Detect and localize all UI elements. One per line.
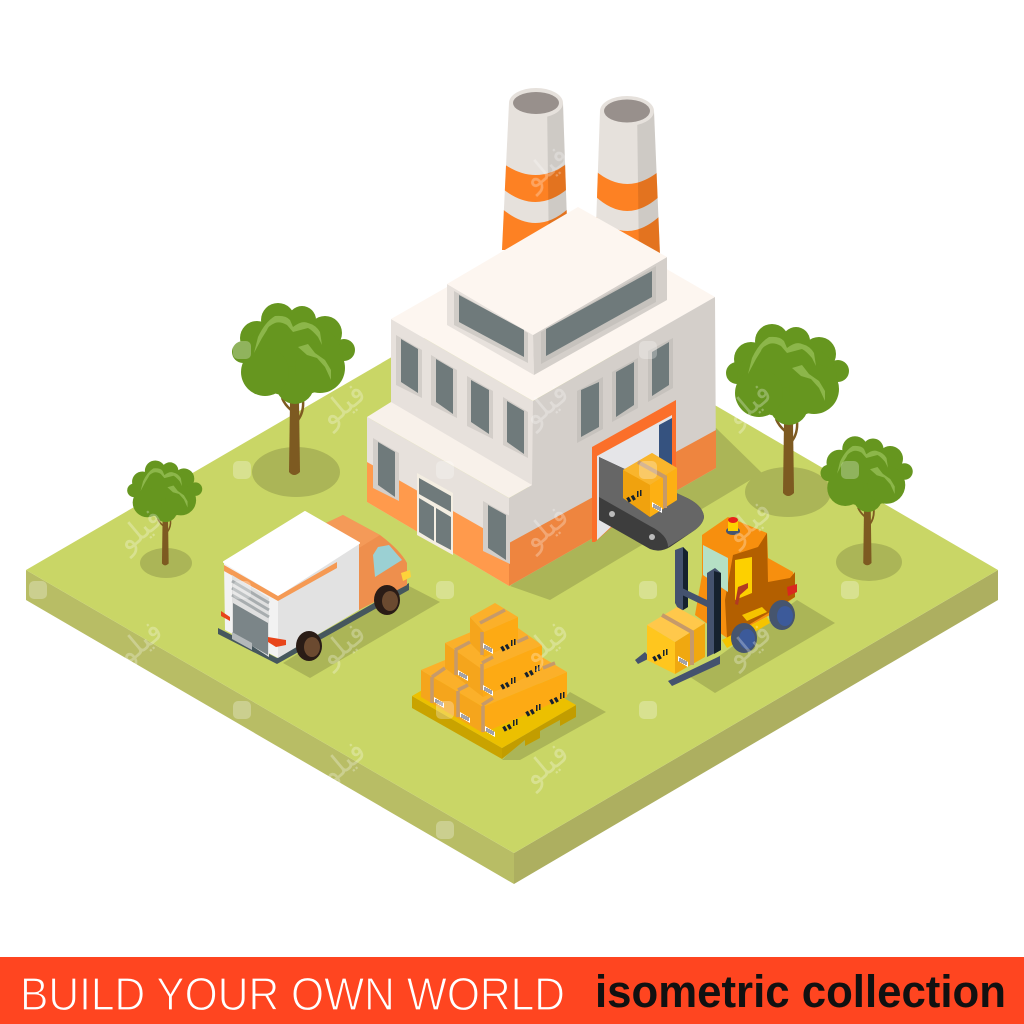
watermarks: فيلو — [311, 376, 373, 435]
box on conveyor — [623, 453, 677, 517]
bottom layer — [421, 635, 567, 733]
chimney: left — [502, 88, 567, 250]
body — [695, 517, 795, 638]
windows: right wall — [577, 338, 673, 443]
upper block roof — [391, 215, 715, 401]
carried box — [647, 607, 705, 674]
watermarks: فيلو — [514, 614, 576, 673]
tree: small left — [127, 460, 202, 565]
chimney: right — [596, 96, 660, 253]
windows: left wall — [373, 335, 528, 564]
cab — [326, 515, 411, 610]
pallet of boxes — [412, 603, 576, 759]
watermarks: فيلو — [514, 376, 576, 435]
watermarks: فيلو — [108, 614, 170, 673]
banner text: build your own world: BUILD YOUR OWN WORLD — [20, 968, 565, 1020]
ground shadows — [140, 428, 902, 760]
cargo box — [224, 512, 359, 658]
tail lights — [221, 611, 230, 621]
main right wall — [509, 297, 716, 586]
delivery truck — [218, 512, 411, 664]
mast front upright — [707, 568, 721, 657]
conveyor belt with box — [599, 453, 704, 551]
watermarks: فيلو — [514, 736, 576, 795]
handling marks — [434, 639, 564, 737]
orange base left — [367, 462, 509, 586]
wing roof — [367, 402, 532, 498]
mast rear upright — [675, 547, 688, 612]
watermarks: فيلو — [311, 734, 373, 793]
chassis — [218, 583, 409, 664]
footboards — [722, 607, 770, 648]
top box — [470, 603, 518, 657]
tree: small right — [820, 436, 913, 565]
watermarks: فيلو — [514, 139, 576, 198]
watermarks: فيلو — [108, 501, 170, 560]
rear shutter — [232, 575, 269, 657]
orange base right — [509, 430, 716, 586]
wheels — [296, 585, 400, 661]
watermarks: فيلو — [717, 376, 779, 435]
penthouse — [447, 207, 667, 375]
watermarks: فيلو — [717, 494, 779, 553]
wing left wall — [367, 417, 509, 586]
banner text: isometric collection: isometric collection — [595, 966, 1006, 1017]
watermarks: فيلو — [717, 616, 779, 675]
steering and lights — [735, 583, 797, 605]
fork front — [668, 656, 720, 686]
beacon — [726, 517, 740, 535]
banner — [0, 957, 1024, 1024]
entrance door — [417, 473, 453, 555]
factory building — [367, 207, 716, 586]
pallet — [412, 653, 576, 759]
fork rear — [635, 652, 650, 664]
tape strips — [432, 610, 555, 732]
cab interior — [735, 557, 752, 600]
watermarks: فيلو — [514, 499, 576, 558]
upper block left wall — [391, 319, 533, 490]
cab window — [703, 545, 728, 592]
body dark side — [725, 533, 795, 638]
wheels — [731, 600, 795, 653]
cross bar — [682, 588, 707, 607]
loading gate — [592, 400, 676, 542]
watermarks — [29, 139, 859, 839]
tree: large left — [232, 303, 355, 475]
platform: grass ground slab — [26, 287, 998, 884]
watermarks: فيلو — [311, 616, 373, 675]
forklift — [635, 517, 797, 686]
tree: large right — [726, 324, 849, 496]
middle layer — [445, 618, 542, 697]
